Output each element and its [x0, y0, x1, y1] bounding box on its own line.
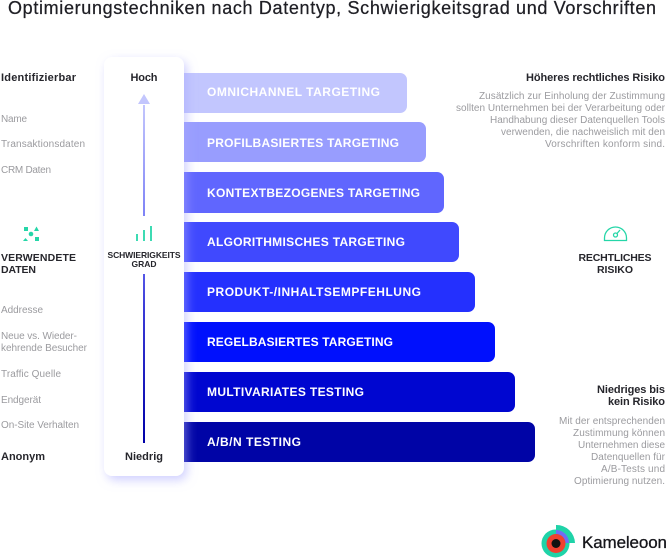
bar: Multivariates Testing: MULTIVARIATES TESTING: [207, 385, 364, 399]
anonymous list: kehrende Besucher: [1, 343, 88, 354]
bar: A/B/N Testing: A/B/N TESTING: [207, 435, 301, 449]
anonymous list: Endgerät: [1, 395, 41, 406]
bar: Algorithmisches Targeting: [184, 222, 459, 262]
logo: Kameleoon: [542, 525, 667, 558]
anonymous list: [1, 305, 88, 431]
bar: Profilbasiertes Targeting: PROFILBASIERTES TARGETING: [207, 136, 399, 150]
panel: data types: [1, 72, 88, 463]
text: low risk description: Mit der entsprechenden: [559, 416, 665, 427]
label: Hoch: Hoch: [130, 72, 158, 84]
bar: Omnichannel Targeting: [184, 73, 407, 113]
identifiable list: Transaktionsdaten: [1, 139, 85, 150]
heading: low risk: [597, 384, 665, 408]
bar: Kontextbezogenes Targeting: KONTEXTBEZOGENES TARGETING: [207, 186, 420, 200]
label: Schwierigkeitsgrad: SCHWIERIGKEITS: [108, 250, 181, 260]
anonymous list: On-Site Verhalten: [1, 420, 79, 431]
bar: Multivariates Testing: [184, 372, 515, 412]
heading: Rechtliches Risiko: RECHTLICHES: [578, 252, 652, 264]
bar: Produkt-/Inhaltsempfehlung: [184, 272, 475, 312]
text: higher risk description: verwenden, die nachweislich mit den: [501, 127, 665, 138]
heading: low risk: kein Risiko: [608, 396, 665, 408]
heading: Rechtliches Risiko: [578, 252, 652, 276]
bar: Kontextbezogenes Targeting: [184, 172, 444, 213]
logo: Kameleoon: Kameleoon: [582, 533, 667, 552]
text: higher risk description: Vorschriften konform sind.: [545, 139, 665, 150]
heading: low risk: Niedriges bis: [597, 384, 665, 396]
anonymous list: Neue vs. Wieder-: [1, 331, 77, 342]
arrow: difficulty axis: [130, 94, 158, 443]
text: low risk description: [559, 416, 666, 487]
heading: higher risk: Höheres rechtliches Risiko: [526, 72, 665, 84]
heading: Anonym: Anonym: [1, 451, 45, 463]
text: higher risk description: Zusätzlich zur Einholung der Zustimmung: [479, 91, 665, 102]
text: higher risk description: [456, 91, 666, 150]
icon: data points: [23, 226, 39, 241]
text: low risk description: Zustimmung können: [573, 428, 665, 439]
identifiable list: Name: [1, 114, 27, 125]
bar: Produkt-/Inhaltsempfehlung: PRODUKT-/INHALTSEMPFEHLUNG: [207, 285, 421, 299]
text: higher risk description: Handhabung dieser Datenquellen Tools: [490, 115, 665, 126]
anonymous list: Traffic Quelle: [1, 369, 61, 380]
text: higher risk description: sollten Unternehmen bei der Verarbeitung oder: [456, 103, 666, 114]
bar: Regelbasiertes Targeting: [184, 322, 495, 362]
identifiable list: [1, 114, 85, 176]
identifiable list: CRM Daten: [1, 165, 51, 176]
panel: technique bars: [184, 73, 535, 462]
label: Schwierigkeitsgrad: [108, 250, 181, 269]
heading: Verwendete Daten: VERWENDETE: [1, 252, 76, 264]
text: low risk description: Datenquellen für: [591, 452, 666, 463]
bar: Omnichannel Targeting: OMNICHANNEL TARGETING: [207, 85, 380, 99]
heading: Verwendete Daten: DATEN: [1, 264, 36, 276]
icon: gauge: [604, 227, 626, 240]
icon: bars: [136, 226, 152, 241]
panel: legal risk: [456, 72, 666, 487]
heading: Verwendete Daten: [1, 252, 76, 276]
text: low risk description: A/B-Tests und: [601, 464, 665, 475]
panel: difficulty card: [104, 57, 184, 476]
bar: Regelbasiertes Targeting: REGELBASIERTES TARGETING: [207, 335, 393, 349]
label: Schwierigkeitsgrad: GRAD: [131, 259, 157, 269]
text: low risk description: Unternehmen diese: [578, 440, 665, 451]
anonymous list: Addresse: [1, 305, 43, 316]
bar: A/B/N Testing: [184, 422, 535, 462]
label: Niedrig: Niedrig: [125, 451, 163, 463]
icon: logo mark: [542, 525, 575, 558]
bar: Algorithmisches Targeting: ALGORITHMISCHES TARGETING: [207, 235, 405, 249]
heading: Identifizierbar: Identifizierbar: [1, 72, 77, 84]
heading: Rechtliches Risiko: RISIKO: [597, 264, 633, 276]
text: low risk description: Optimierung nutzen.: [574, 476, 665, 487]
bar: Profilbasiertes Targeting: [184, 122, 426, 162]
